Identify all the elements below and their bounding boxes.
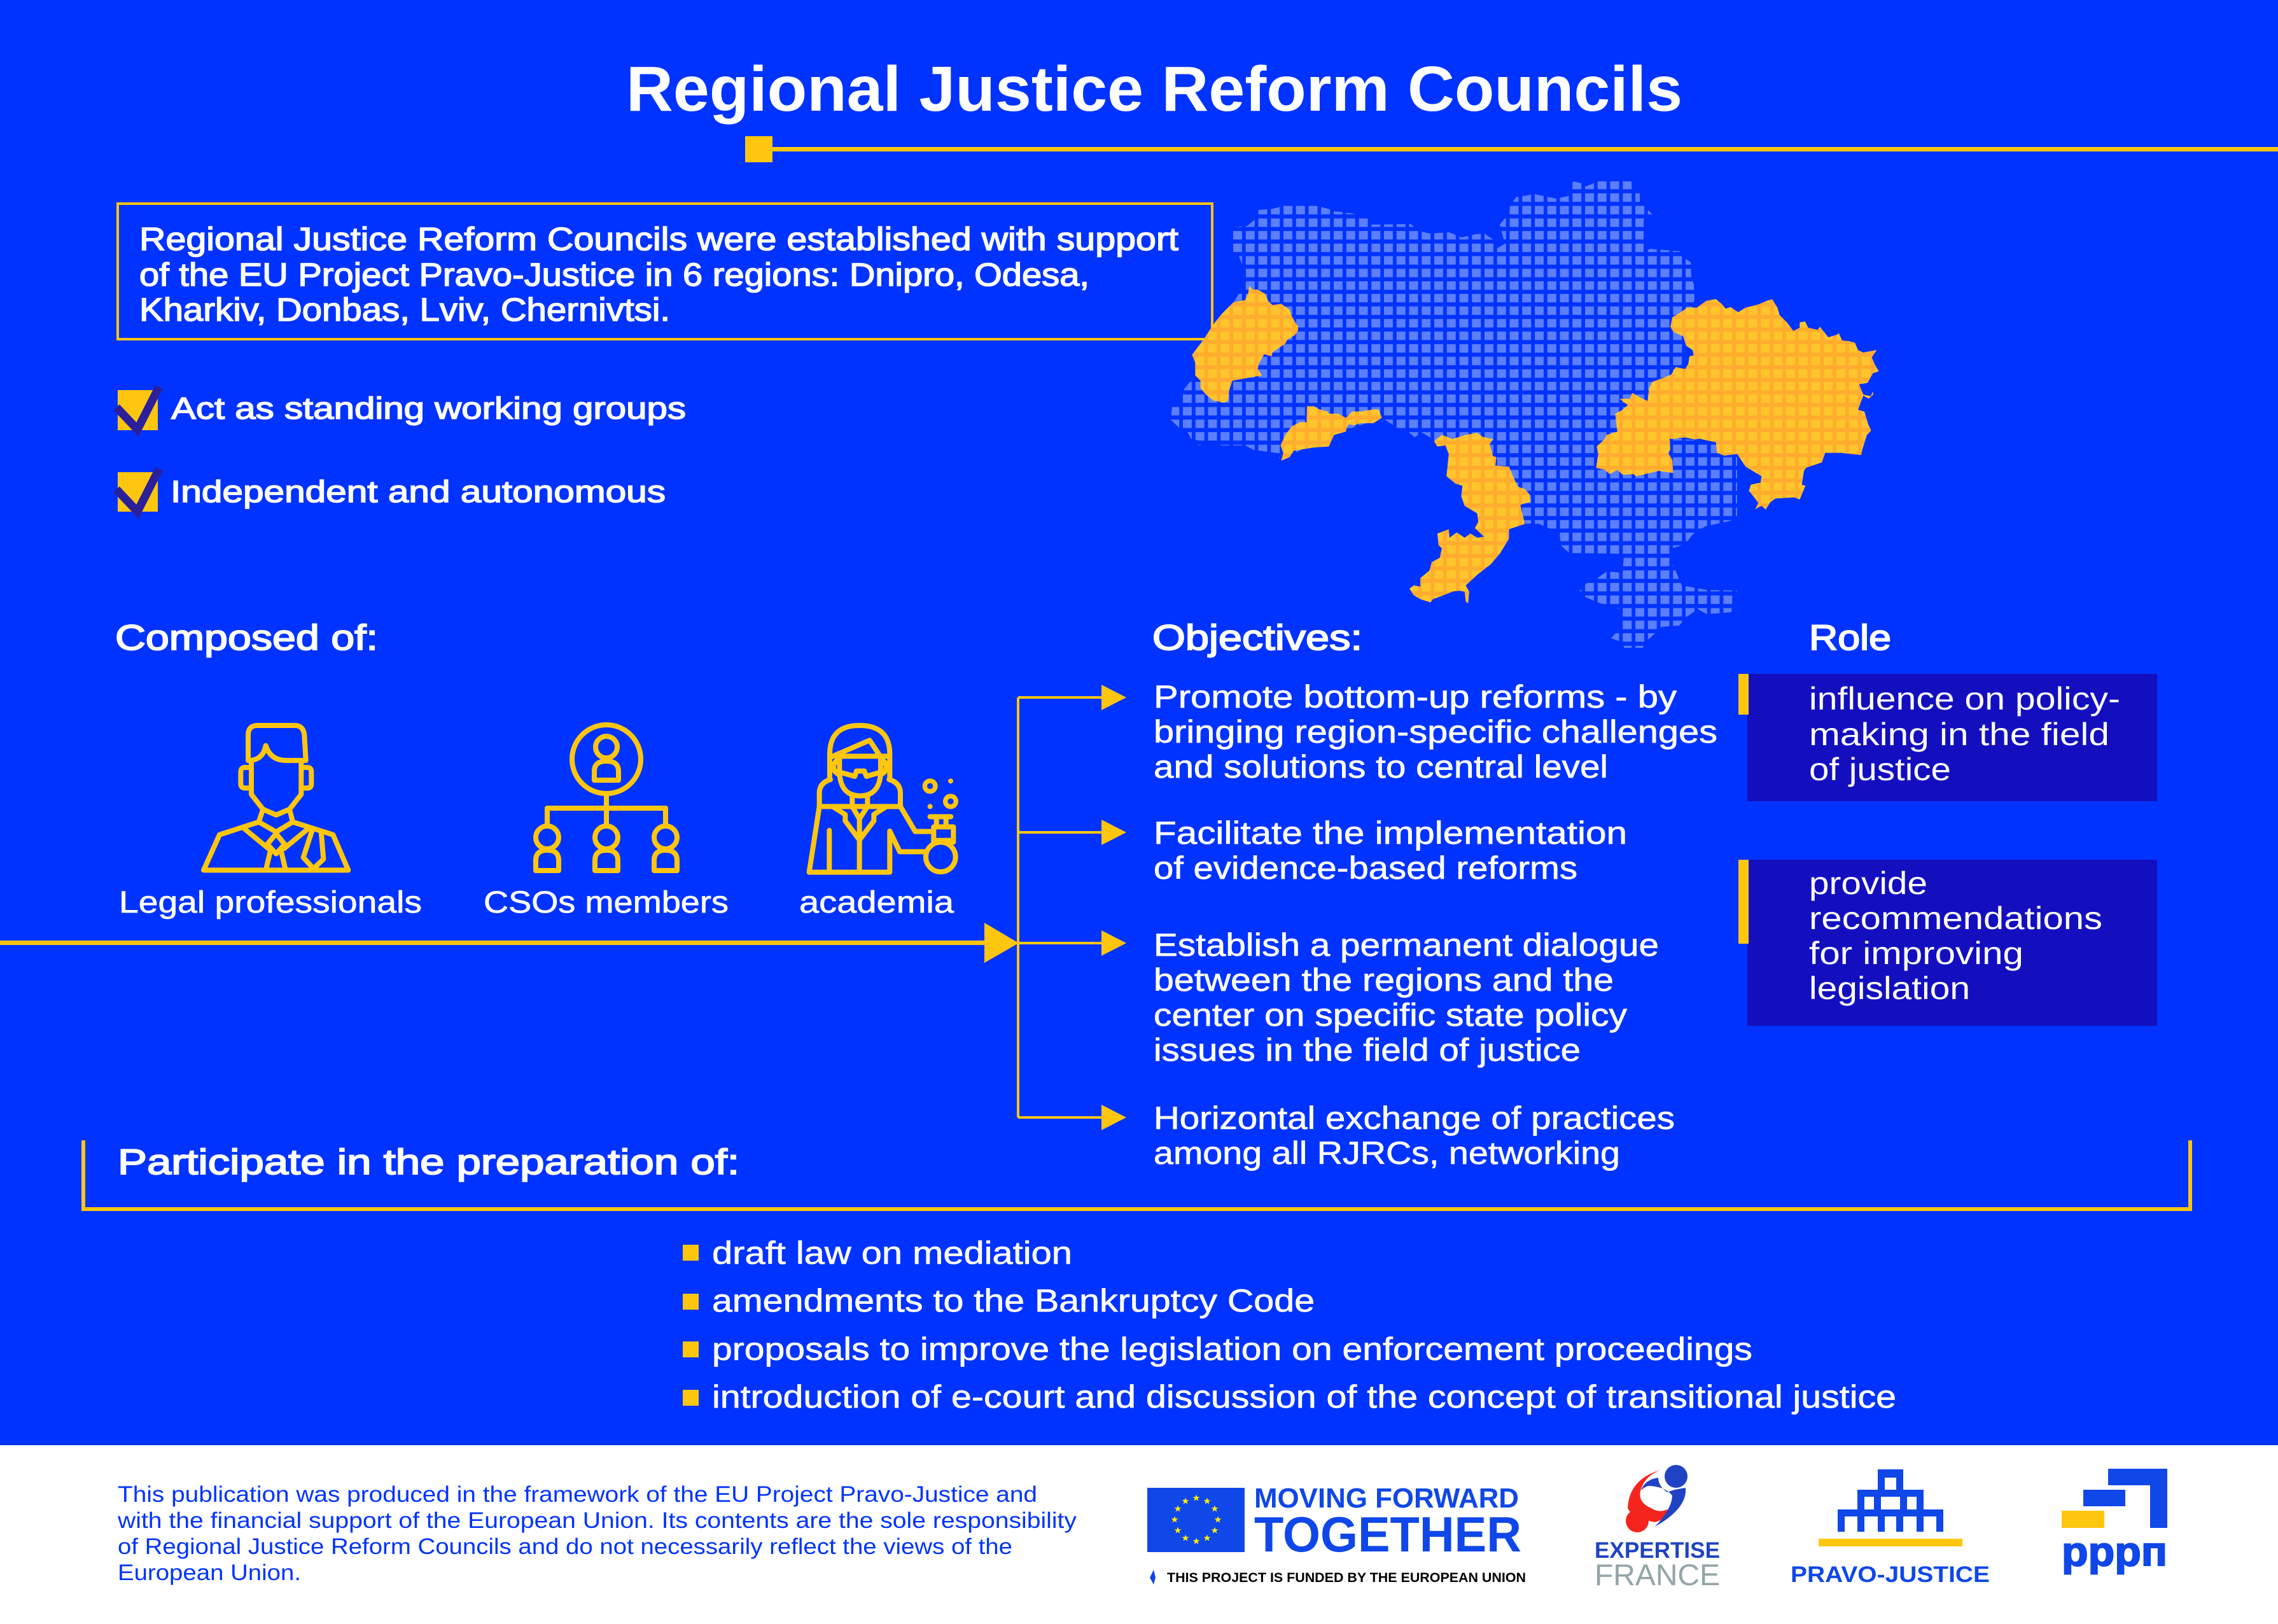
title: Regional Justice Reform Councils xyxy=(626,53,1682,125)
role panel 1: of justice xyxy=(1809,752,1951,787)
objective 1: Promote bottom-up reforms - by xyxy=(1154,679,1677,715)
logo: Expertise France: FRANCE xyxy=(1595,1558,1720,1592)
checklist item: independent xyxy=(116,469,666,512)
map region: Kharkiv, Dnipro, Donbas xyxy=(1594,298,1880,511)
bullet list: preparation items: amendments to the Bankruptcy Code xyxy=(712,1283,1315,1319)
footer disclaimer: European Union. xyxy=(118,1560,301,1585)
role panel 2: provide xyxy=(1809,865,1927,901)
footer disclaimer: with the financial support of the European Union. Its contents are the sole responsibility xyxy=(117,1508,1077,1533)
role panel 1 xyxy=(1738,674,2157,801)
bullet list: preparation items: proposals to improve the legislation on enforcement proceedings xyxy=(712,1331,1752,1367)
logo: EU moving forward together: THIS PROJECT IS FUNDED BY THE EUROPEAN UNION xyxy=(1167,1571,1526,1585)
role panel 2: legislation xyxy=(1809,970,1970,1006)
objective 4: among all RJRCs, networking xyxy=(1154,1135,1620,1171)
objective 4: Horizontal exchange of practices xyxy=(1154,1100,1675,1136)
heading: composed of: Composed of: xyxy=(115,617,378,657)
map region: Lviv xyxy=(1190,283,1298,404)
label: legal professionals: Legal professionals xyxy=(119,886,422,920)
map: country grid xyxy=(1164,178,1737,652)
objective 3: Establish a permanent dialogue xyxy=(1154,927,1659,963)
footer disclaimer: of Regional Justice Reform Councils and do not necessarily reflect the views of the xyxy=(118,1534,1012,1559)
info box: intro text: Regional Justice Reform Councils were established with support xyxy=(139,221,1178,257)
map region: Chernivtsi xyxy=(1279,404,1384,461)
checklist item: standing working groups: Act as standing working groups xyxy=(171,392,686,426)
footer disclaimer xyxy=(117,1482,1077,1585)
label: academia: academia xyxy=(799,886,954,920)
role panel 2: for improving xyxy=(1809,935,2023,971)
logo: Expertise France xyxy=(1595,1465,1720,1592)
bullet list: preparation items: draft law on mediation xyxy=(712,1235,1072,1271)
icon: CSO members xyxy=(536,725,677,871)
objective 1: bringing region-specific challenges xyxy=(1154,714,1717,750)
label: CSOs members: CSOs members xyxy=(484,886,729,920)
logo: PPPN: рррп xyxy=(2062,1529,2167,1574)
role panel 2 xyxy=(1738,860,2157,1026)
logo: Expertise France: EXPERTISE xyxy=(1595,1538,1720,1563)
logo: Pravo-Justice xyxy=(1791,1469,1990,1587)
objective 4 xyxy=(1154,1100,1675,1171)
logo: EU moving forward together xyxy=(1147,1483,1526,1585)
logo: Pravo-Justice: PRAVO-JUSTICE xyxy=(1791,1562,1990,1587)
objective 1 xyxy=(1154,679,1717,785)
info box: intro text: of the EU Project Pravo-Justice in 6 regions: Dnipro, Odesa, xyxy=(139,256,1089,293)
logo: EU moving forward together: MOVING FORWARD xyxy=(1254,1483,1519,1514)
objective 3: center on specific state policy xyxy=(1154,997,1627,1033)
role panel 1: making in the field xyxy=(1809,717,2109,752)
role panel 2: recommendations xyxy=(1809,900,2102,936)
checklist item: standing working groups xyxy=(116,387,686,430)
role panel 1: influence on policy- xyxy=(1809,681,2120,717)
info box: intro text xyxy=(118,204,1212,339)
heading: role: Role xyxy=(1809,617,1891,657)
checklist item: independent: Independent and autonomous xyxy=(171,475,666,509)
objective 2 xyxy=(1154,815,1627,886)
info box: intro text: Kharkiv, Donbas, Lviv, Chernivtsi. xyxy=(139,291,670,328)
bullet list: preparation items: introduction of e-court and discussion of the concept of transitional justice xyxy=(712,1379,1896,1415)
map region: Odesa xyxy=(1408,431,1532,605)
objective 2: of evidence-based reforms xyxy=(1154,850,1577,886)
objective 1: and solutions to central level xyxy=(1154,749,1608,785)
logo: PPPN xyxy=(2062,1469,2167,1574)
objective 3 xyxy=(1154,927,1659,1068)
icon: legal professional xyxy=(204,725,348,870)
title rule with square marker xyxy=(745,136,2278,162)
heading: objectives: Objectives: xyxy=(1152,617,1362,657)
logo: EU moving forward together: TOGETHER xyxy=(1254,1506,1521,1562)
objective 3: issues in the field of justice xyxy=(1154,1032,1581,1068)
icon: academia researcher with flask xyxy=(809,725,956,872)
bracket connecting arrows to objectives xyxy=(1018,685,1126,1130)
objective 3: between the regions and the xyxy=(1154,962,1614,998)
objective 2: Facilitate the implementation xyxy=(1154,815,1627,851)
map of Ukraine with highlighted regions xyxy=(1164,178,1880,652)
heading: participate: Participate in the preparation of: xyxy=(118,1142,739,1182)
footer disclaimer: This publication was produced in the framework of the EU Project Pravo-Justice and xyxy=(118,1482,1037,1507)
footer band xyxy=(0,1445,2278,1624)
participate bracket xyxy=(83,1140,2190,1209)
arrow: composition to objectives xyxy=(0,923,1019,963)
bullet list: preparation items xyxy=(683,1235,1896,1415)
